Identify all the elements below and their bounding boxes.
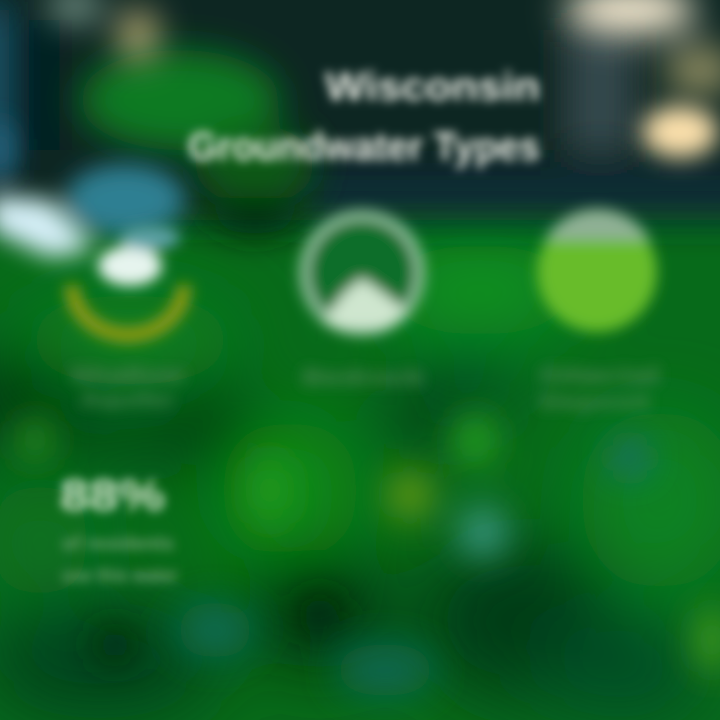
title: Wisconsin xyxy=(325,65,540,109)
statistic description xyxy=(62,533,178,587)
statistic number: 88% xyxy=(60,471,165,520)
icon labels: Aquifer xyxy=(80,390,175,410)
icon: left circle with olive ring xyxy=(72,226,184,335)
icon labels xyxy=(70,365,660,412)
title: Groundwater Types xyxy=(188,125,540,169)
icon labels: Bedrock xyxy=(302,367,425,389)
icon labels: Glacial xyxy=(540,365,660,387)
title xyxy=(188,65,540,169)
icon labels: Shallow xyxy=(70,365,186,387)
background: peach sun glow xyxy=(642,106,718,158)
background: dark upper band xyxy=(0,0,720,220)
statistic description: use this water xyxy=(62,565,178,587)
background: sky patch left xyxy=(0,120,185,258)
background: field colour variation xyxy=(0,245,720,720)
background: light highlights top xyxy=(49,0,720,96)
icon labels: Deposit xyxy=(540,392,650,412)
statistic description: of residents xyxy=(62,533,174,555)
background: small coloured bokeh xyxy=(17,414,720,696)
icon: centre circle with mountain xyxy=(304,215,420,331)
statistic callout xyxy=(60,471,178,587)
icon: right circle lime xyxy=(537,209,657,332)
background: green foliage top left xyxy=(80,50,315,233)
